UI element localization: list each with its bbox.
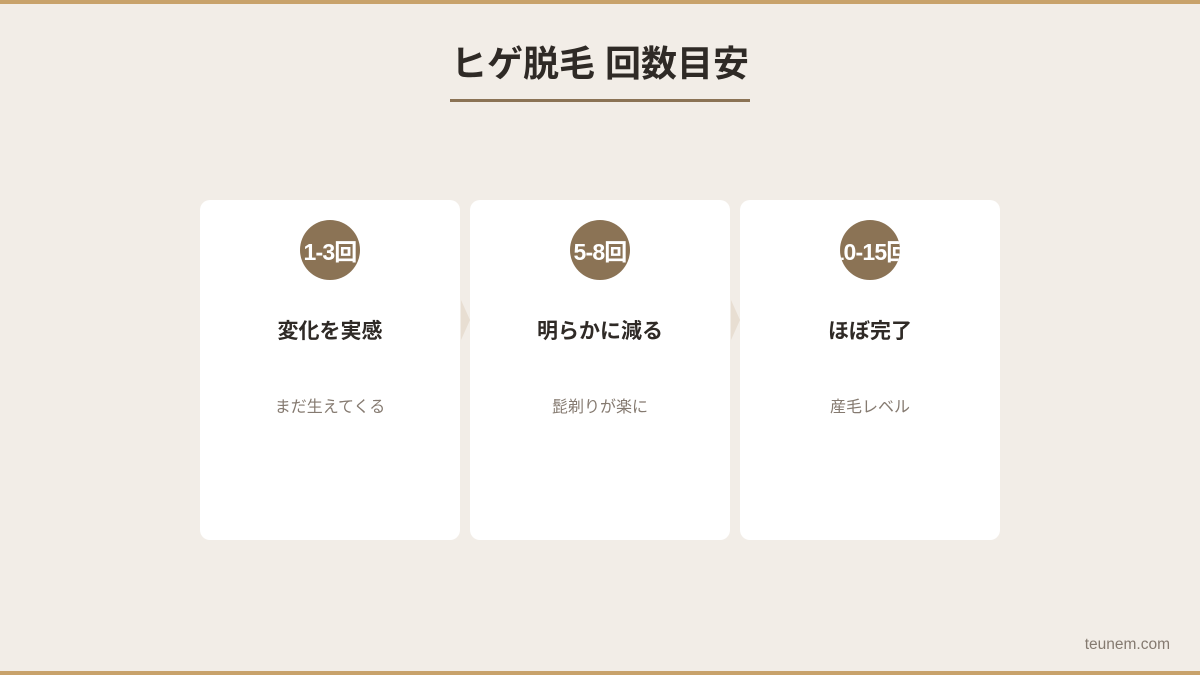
arrow 2 [731,300,740,340]
panel: step 3 [740,200,1000,540]
badge: 5-8回 [570,220,630,280]
heading: step 1: 変化を実感 [278,320,382,343]
text: step 3: 産毛レベル [830,399,910,416]
badge: 1-3回: 1-3回 [303,239,357,265]
footer: teunem.com [1085,636,1170,653]
heading: step 2: 明らかに減る [537,320,663,343]
text: step 2: 髭剃りが楽に [552,399,648,416]
panel: step 2 [470,200,730,540]
badge: 1-3回 [300,220,360,280]
text: step 1: まだ生えてくる [275,399,385,416]
badge: 5-8回: 5-8回 [573,239,627,265]
heading: step 3: ほぼ完了 [828,320,912,343]
title: ヒゲ脱毛 回数目安 [451,43,749,84]
panel: step 1 [200,200,460,540]
arrow 1 [461,300,470,340]
badge: 10-15回 [840,220,900,280]
